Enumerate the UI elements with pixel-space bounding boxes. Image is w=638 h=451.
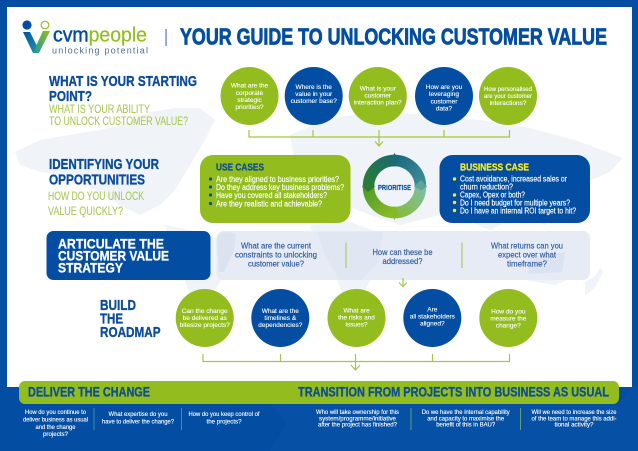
- heading: use cases: USE CASES: [216, 162, 264, 174]
- text: ownership: Who will take ownership for this: [316, 409, 400, 416]
- list: business case questions: Cost avoidance, increased sales or: [460, 174, 567, 184]
- heading: identifying your opportunities: HOW DO YOU UNLOCK: [48, 189, 144, 203]
- text: internal capability: [422, 409, 510, 428]
- text: constraints: customer value?: [248, 258, 304, 268]
- text: how addressed: addressed?: [382, 256, 423, 266]
- circle: bitesize projects: [176, 289, 234, 347]
- logo: [22, 20, 148, 55]
- text: expertise: [102, 411, 174, 426]
- text: constraints: What are the current: [241, 240, 312, 250]
- text: constraints: constraints to unlocking: [235, 250, 317, 260]
- heading: identifying your opportunities: [48, 156, 159, 218]
- text: continue to deliver: [23, 409, 88, 438]
- circle: corporate priorities: What are the: [231, 82, 268, 90]
- heading: build the roadmap: [100, 297, 160, 341]
- circle: measure: How do you: [491, 308, 526, 316]
- circle: timelines: timelines &: [264, 315, 297, 322]
- circle: customer data: data?: [436, 106, 453, 112]
- list: business case questions: Do I have an internal ROI target to hit?: [460, 206, 576, 216]
- text: returns: expect over what: [498, 250, 557, 260]
- heading: build the roadmap: ROADMAP: [100, 324, 160, 341]
- text: team size: Will we need to increase the size: [532, 409, 617, 416]
- arrow: strategy to roadmap: [399, 278, 407, 286]
- text: how addressed: How can these be: [372, 247, 433, 257]
- text: continue to deliver: How do you continue to: [25, 409, 86, 416]
- label: prioritise: PRIORITISE: [378, 183, 411, 192]
- text: keep control: the projects?: [206, 418, 242, 426]
- text: ownership: system/programme/initiative: [319, 416, 396, 422]
- icon: prioritise ring: [362, 153, 427, 220]
- text: how addressed: [372, 247, 433, 266]
- heading: what is your starting point: TO UNLOCK CUSTOMER VALUE?: [49, 114, 188, 128]
- circle: stakeholders: all stakeholders: [410, 314, 456, 320]
- heading: what is your starting point: WHAT IS YOUR STARTING: [49, 73, 197, 90]
- panel: strategy questions: [216, 231, 590, 280]
- text: expertise: What expertise do you: [108, 411, 168, 418]
- circle: personalised interactions: are your customer: [484, 93, 533, 100]
- circle: risks: the risks and: [338, 314, 375, 322]
- panel: articulate the customer value strategy: STRATEGY: [58, 260, 124, 276]
- circle: personalised interactions: [479, 67, 537, 125]
- panel: business case: [440, 155, 590, 223]
- circle: customer data: How are you: [426, 84, 463, 91]
- text: keep control: How do you keep control of: [188, 411, 260, 418]
- heading: identifying your opportunities: IDENTIFYING YOUR: [49, 156, 159, 173]
- text: ownership: [316, 409, 400, 428]
- arrow: top bracket: [249, 130, 510, 146]
- heading: identifying your opportunities: OPPORTUNITIES: [49, 172, 145, 188]
- text: internal capability: benefit of this in BAU?: [436, 422, 496, 428]
- circle: customer interaction plan: What is your: [360, 86, 397, 92]
- heading: build the roadmap: THE: [100, 310, 123, 328]
- heading: identifying your opportunities: VALUE QUICKLY?: [48, 204, 123, 218]
- circle: personalised interactions: How personalised: [484, 86, 532, 93]
- roadmap question circles: [176, 289, 537, 347]
- circle: personalised interactions: interactions?: [490, 100, 527, 107]
- circle: customer data: leveraging: [429, 91, 459, 98]
- heading: what is your starting point: WHAT IS YOUR ABILITY: [49, 102, 150, 116]
- circle: corporate priorities: [220, 67, 278, 125]
- circle: value in customer base: value in your: [295, 91, 333, 98]
- text: keep control: [188, 411, 260, 426]
- text: returns: timeframe?: [507, 258, 547, 268]
- circle: bitesize projects: Can the change: [182, 308, 228, 315]
- circle: corporate priorities: corporate: [236, 90, 264, 97]
- list: use case questions: [209, 175, 344, 208]
- panel: articulate the customer value strategy: ARTICULATE THE: [58, 236, 164, 252]
- text: continue to deliver: and the change: [36, 424, 76, 431]
- heading: build the roadmap: BUILD: [100, 297, 136, 314]
- list: use case questions: Have you covered all stakeholders?: [216, 191, 327, 200]
- text: ownership: after the project has finished?: [318, 422, 397, 428]
- circle: risks: issues?: [345, 322, 368, 328]
- circle: customer data: [415, 67, 473, 125]
- circle: risks: What are: [343, 308, 370, 314]
- panel: articulate the customer value strategy: [46, 231, 210, 280]
- text: returns: What returns can you: [491, 240, 563, 250]
- text: continue to deliver: projects?: [43, 431, 68, 438]
- circle: timelines: What are the: [262, 308, 299, 315]
- logo: cvmpeople: [53, 24, 147, 46]
- list: business case questions: Do I need budget for multiple years?: [460, 198, 570, 208]
- list: business case questions: churn reduction?: [460, 182, 513, 192]
- circle: customer interaction plan: customer: [364, 92, 392, 100]
- text: team size: tional activity?: [554, 422, 594, 428]
- circle: measure: change?: [496, 322, 521, 330]
- list: business case questions: [453, 174, 576, 216]
- circle: stakeholders: [403, 289, 461, 347]
- world map background: [15, 108, 623, 310]
- text: team size: of the team to manage this addi-: [532, 416, 616, 422]
- text: constraints: [235, 240, 317, 268]
- circle: bitesize projects: bitesize projects?: [180, 322, 230, 329]
- heading: what is your starting point: POINT?: [49, 88, 92, 105]
- list: business case questions: Capex, Opex or both?: [460, 190, 525, 200]
- circle: customer interaction plan: [349, 67, 407, 125]
- circle: stakeholders: aligned?: [420, 320, 445, 328]
- banner: deliver and transition: [19, 381, 619, 404]
- bottom band chevron: [270, 387, 638, 451]
- list: use case questions: Are they aligned to business priorities?: [216, 175, 339, 184]
- circle: value in customer base: Where is the: [295, 84, 332, 91]
- circle: customer interaction plan: interaction plan?: [354, 100, 402, 106]
- circle: stakeholders: Are: [427, 306, 438, 314]
- list: use case questions: Do they address key business problems?: [216, 183, 344, 192]
- heading: deliver the change: DELIVER THE CHANGE: [28, 384, 150, 400]
- logo: unlocking potential: [52, 46, 148, 56]
- panel: use cases: [200, 155, 350, 223]
- circle: timelines: dependencies?: [258, 322, 303, 329]
- list: use case questions: Are they realistic and achievable?: [216, 200, 322, 208]
- arrow: roadmap bracket: [203, 354, 510, 370]
- heading: business case: BUSINESS CASE: [460, 162, 529, 174]
- transition questions: [316, 408, 617, 430]
- panel: articulate the customer value strategy: CUSTOMER VALUE: [58, 248, 169, 264]
- text: continue to deliver: deliver business as usual: [23, 416, 88, 424]
- circle: value in customer base: customer base?: [291, 98, 337, 105]
- circle: measure: [479, 289, 537, 347]
- text: returns: [491, 240, 563, 268]
- text: internal capability: and capacity to maximise the: [427, 416, 505, 422]
- heading: what is your starting point: [49, 73, 197, 128]
- text: expertise: have to deliver the change?: [102, 418, 174, 426]
- circle: customer data: customer: [431, 98, 458, 106]
- circle: value in customer base: [285, 67, 343, 125]
- circle: bitesize projects: be delivered as: [183, 315, 227, 322]
- circle: corporate priorities: priorities?: [235, 104, 264, 111]
- text: internal capability: Do we have the internal capability: [422, 409, 510, 416]
- top question circles: [220, 67, 537, 125]
- circle: timelines: [251, 289, 309, 347]
- text: team size: [532, 409, 617, 428]
- circle: risks: [328, 289, 386, 347]
- circle: corporate priorities: strategic: [237, 97, 263, 104]
- deliver questions: [23, 408, 260, 438]
- circle: measure: measure the: [490, 316, 527, 322]
